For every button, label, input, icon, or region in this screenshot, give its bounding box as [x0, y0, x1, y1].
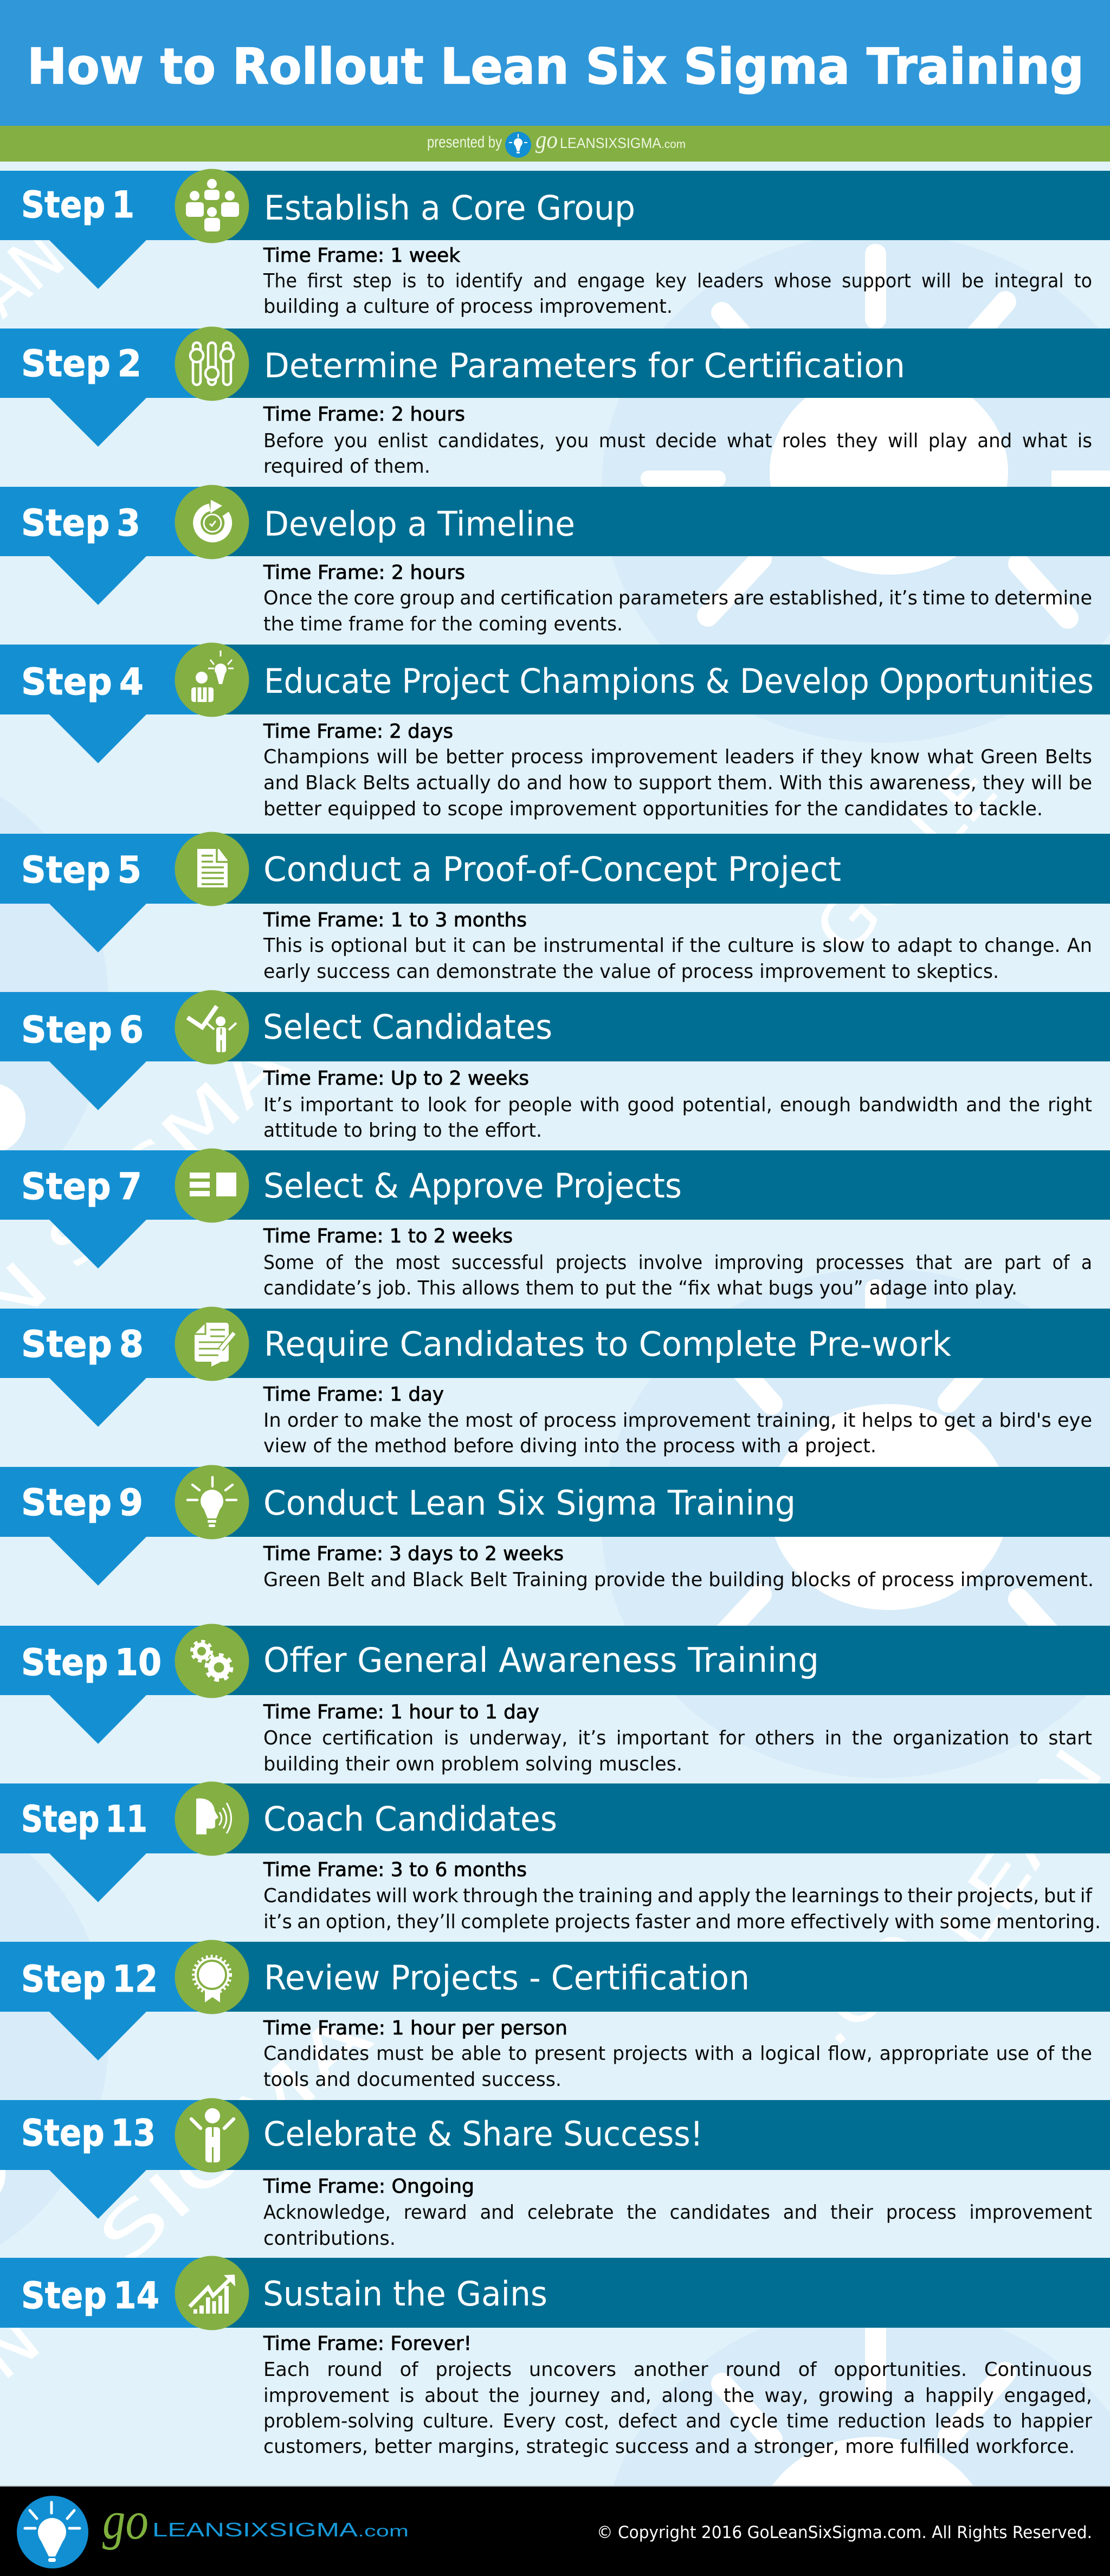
description: contributions.	[263, 2227, 396, 2250]
step title: Develop a Timeline	[264, 504, 575, 544]
description: better equipped to scope improvement opportunities for the candidates to tackle.	[263, 798, 1043, 820]
step label: Step 14	[21, 2275, 159, 2317]
description: Champions will be better process improvement leaders if they know what Green Belts	[263, 746, 1092, 768]
icon: speaking head	[175, 1781, 249, 1856]
step title: Offer General Awareness Training	[263, 1640, 819, 1680]
step 2	[0, 326, 1110, 478]
icon: gears	[175, 1624, 249, 1698]
description	[263, 2359, 1092, 2458]
icon: certification seal	[175, 1940, 249, 2014]
step 8	[0, 1306, 1110, 1457]
step 12	[0, 1940, 1110, 2091]
description	[263, 1409, 1092, 1457]
description	[263, 2043, 1092, 2091]
step title: Sustain the Gains	[263, 2274, 547, 2314]
band and pointer	[0, 487, 1110, 605]
step label: Step 11	[21, 1798, 147, 1841]
step title: Establish a Core Group	[264, 188, 635, 228]
step 1	[0, 169, 1110, 318]
time frame: Time Frame: 2 days	[263, 720, 453, 743]
step label: Step 8	[21, 1323, 144, 1366]
description: tools and documented success.	[263, 2069, 562, 2091]
step label: Step 2	[21, 343, 141, 385]
step label: Step 7	[21, 1165, 142, 1208]
description: candidate’s job. This allows them to put the “fix what bugs you” adage into play.	[263, 1277, 1017, 1299]
description	[263, 1094, 1092, 1142]
presented-by bar: LEANSIXSIGMA	[560, 135, 661, 151]
step title: Coach Candidates	[263, 1799, 557, 1839]
time frame: Time Frame: 3 days to 2 weeks	[263, 1543, 564, 1565]
presented-by bar	[0, 126, 1110, 162]
description: Once certification is underway, it’s important for others in the organization to start	[263, 1727, 1092, 1749]
description	[263, 1885, 1101, 1933]
description: problem-solving culture. Every cost, defect and cycle time reduction leads to happier	[263, 2410, 1092, 2432]
time frame: Time Frame: 1 hour to 1 day	[263, 1701, 539, 1723]
icon: light bulb	[175, 1465, 249, 1540]
band and pointer	[0, 329, 1110, 447]
description: Candidates will work through the training and apply the learnings to their projects, but if	[263, 1885, 1093, 1907]
band and pointer	[0, 2100, 1110, 2219]
icon: celebrating person	[175, 2098, 249, 2173]
step label: Step 5	[21, 849, 141, 892]
step 3	[0, 485, 1110, 635]
step title: Select Candidates	[263, 1007, 552, 1047]
footer	[0, 2485, 1110, 2576]
step label: Step 4	[21, 661, 144, 704]
description: Candidates must be able to present projects with a logical flow, appropriate use of the	[263, 2043, 1092, 2065]
step 5	[0, 832, 1110, 983]
time frame: Time Frame: 1 to 2 weeks	[263, 1225, 513, 1247]
step title: Conduct Lean Six Sigma Training	[263, 1483, 796, 1523]
description: the time frame for the coming events.	[263, 613, 623, 635]
time frame: Time Frame: 1 to 3 months	[263, 909, 527, 931]
description	[263, 1252, 1092, 1299]
time frame: Time Frame: Forever!	[263, 2333, 472, 2355]
time frame: Time Frame: 3 to 6 months	[263, 1859, 527, 1881]
band and pointer	[0, 171, 1110, 289]
description: It’s important to look for people with good potential, enough bandwidth and the right	[263, 1094, 1092, 1116]
background watermark: bulbs and diagonal text: GO LE	[800, 750, 1012, 970]
presented-by bar: .com	[661, 138, 686, 151]
description: attitude to bring to the effort.	[263, 1119, 542, 1142]
title: How to Rollout Lean Six Sigma Training	[27, 38, 1084, 95]
band and pointer	[0, 1467, 1110, 1586]
step 10	[0, 1624, 1110, 1775]
copyright: © Copyright 2016 GoLeanSixSigma.com. All Rights Reserved.	[597, 2523, 1092, 2542]
icon: footer bulb logo	[17, 2496, 88, 2568]
time frame: Time Frame: 1 week	[263, 244, 460, 267]
description: improvement is about the journey and, along the way, growing a happily engaged,	[263, 2385, 1092, 2407]
band and pointer	[0, 992, 1110, 1110]
step title: Determine Parameters for Certification	[264, 346, 905, 385]
description	[263, 270, 1092, 318]
presented-by bar: go	[535, 126, 558, 153]
step 4	[0, 643, 1110, 820]
description: view of the method before diving into the process with a project.	[263, 1435, 876, 1457]
description: building their own problem solving muscles.	[263, 1753, 682, 1775]
icon: timeline clock	[175, 485, 249, 559]
description: it’s an option, they’ll complete projects faster and more effectively with some mentoring.	[263, 1911, 1101, 1933]
step title: Review Projects - Certification	[264, 1958, 750, 1998]
time frame: Time Frame: 1 day	[263, 1383, 444, 1406]
step 9	[0, 1465, 1110, 1591]
band and pointer	[0, 2258, 1110, 2328]
step 14	[0, 2256, 1110, 2458]
band and pointer	[0, 1783, 1110, 1902]
step label: Step 1	[21, 184, 134, 227]
icon: growth chart	[175, 2256, 249, 2330]
time frame: Time Frame: Up to 2 weeks	[263, 1067, 529, 1090]
band and pointer	[0, 1309, 1110, 1427]
background watermark: bulbs and diagonal text: LEAN	[925, 1735, 1110, 1966]
step label: Step 3	[21, 502, 140, 545]
description: required of them.	[263, 455, 430, 478]
description: In order to make the most of process improvement training, it helps to get a bird's eye	[263, 1409, 1092, 1432]
description	[263, 935, 1092, 983]
description: This is optional but it can be instrumental if the culture is slow to adapt to change. An	[263, 935, 1092, 957]
description: Green Belt and Black Belt Training provide the building blocks of process improvement.	[263, 1569, 1094, 1591]
description: and Black Belts actually do and how to support them. With this awareness, they will be	[263, 772, 1092, 794]
icon: pre-work document	[175, 1306, 249, 1381]
time frame: Time Frame: 2 hours	[263, 403, 465, 426]
step title: Select & Approve Projects	[263, 1166, 682, 1206]
step label: Step 9	[21, 1482, 143, 1524]
step label: Step 6	[21, 1009, 144, 1052]
step label: Step 13	[21, 2112, 156, 2155]
description: early success can demonstrate the value of process improvement to skeptics.	[263, 961, 999, 983]
step 6	[0, 990, 1110, 1142]
icon: champion with bulb	[175, 643, 249, 717]
footer wordmark: .com	[358, 2522, 409, 2540]
description	[263, 587, 1092, 635]
footer wordmark: LEANSIXSIGMA	[152, 2519, 358, 2541]
header banner	[0, 0, 1110, 126]
time frame: Time Frame: Ongoing	[263, 2175, 474, 2198]
description	[263, 2201, 1092, 2250]
band and pointer	[0, 1150, 1110, 1268]
icon: select candidate	[175, 990, 249, 1065]
description: building a culture of process improvement.	[263, 295, 673, 318]
step title: Conduct a Proof-of-Concept Project	[263, 849, 841, 889]
description: customers, better margins, strategic success and a stronger, more fulfilled workforce.	[263, 2436, 1075, 2458]
step title: Celebrate & Share Success!	[263, 2114, 703, 2154]
description: Once the core group and certification parameters are established, it’s time to determine	[263, 587, 1092, 609]
footer wordmark	[102, 2490, 409, 2551]
presented-by bar: presented by	[427, 133, 502, 151]
step title: Require Candidates to Complete Pre-work	[264, 1324, 951, 1364]
band and pointer	[0, 645, 1110, 763]
description: Each round of projects uncovers another round of opportunities. Continuous	[263, 2359, 1092, 2381]
footer wordmark: go	[102, 2490, 149, 2551]
step label: Step 12	[21, 1958, 158, 2001]
step 13	[0, 2098, 1110, 2250]
band and pointer	[0, 834, 1110, 952]
time frame: Time Frame: 1 hour per person	[263, 2017, 567, 2039]
time frame: Time Frame: 2 hours	[263, 562, 465, 584]
icon: project list	[175, 1148, 249, 1223]
step 11	[0, 1781, 1110, 1933]
icon: document	[175, 832, 249, 906]
description	[263, 746, 1092, 820]
step label: Step 10	[21, 1641, 162, 1684]
step 7	[0, 1148, 1110, 1299]
icon: parameter sliders	[175, 326, 249, 401]
band and pointer	[0, 1942, 1110, 2060]
background watermark: bulbs and diagonal text: SIGMA	[84, 1997, 386, 2279]
icon: core group	[175, 169, 249, 243]
background watermark: bulbs and diagonal text: .CO	[793, 1916, 942, 2061]
band and pointer	[0, 1626, 1110, 1744]
description	[263, 1727, 1092, 1775]
description	[263, 430, 1092, 478]
